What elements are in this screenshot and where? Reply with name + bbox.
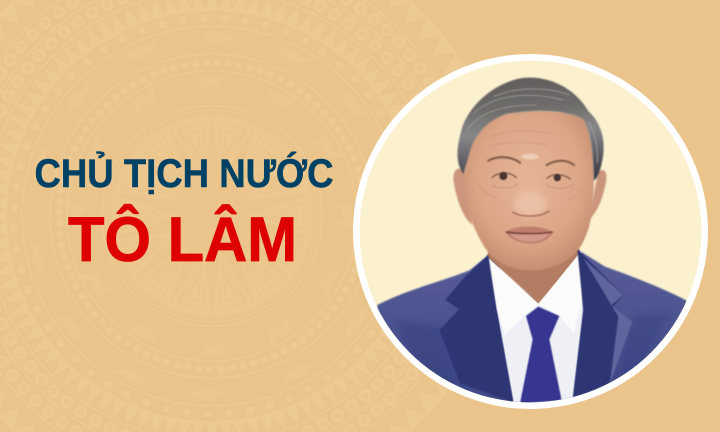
right eye	[547, 174, 571, 181]
mouth line	[506, 232, 553, 233]
suit shadow right	[619, 316, 664, 378]
title: name: TÔ LÂM	[68, 204, 297, 275]
neck	[487, 240, 580, 304]
nose	[513, 191, 547, 217]
mouth	[505, 226, 553, 244]
hair streaks	[467, 89, 598, 163]
left eye	[492, 172, 517, 180]
portrait figure	[377, 78, 687, 417]
eyebrows	[488, 157, 520, 163]
suit shadow left	[398, 322, 458, 386]
shirt	[487, 252, 583, 403]
lower lip	[511, 233, 549, 242]
eye bags	[492, 183, 574, 188]
portrait	[356, 57, 705, 417]
nose base	[513, 211, 549, 216]
portrait ring	[356, 57, 705, 406]
right lapel fold	[583, 258, 633, 383]
suit	[377, 249, 687, 417]
right lapel	[572, 249, 624, 397]
hair	[457, 78, 604, 181]
right ear	[588, 170, 606, 220]
face	[464, 111, 594, 271]
left collar	[488, 257, 538, 335]
left lapel	[439, 255, 513, 402]
right collar	[538, 251, 582, 333]
tie	[520, 307, 562, 403]
left ear	[453, 169, 473, 225]
forehead highlight	[521, 154, 539, 160]
forehead wrinkles	[478, 131, 587, 200]
title: position: CHỦ TỊCH NƯỚC	[34, 150, 334, 196]
